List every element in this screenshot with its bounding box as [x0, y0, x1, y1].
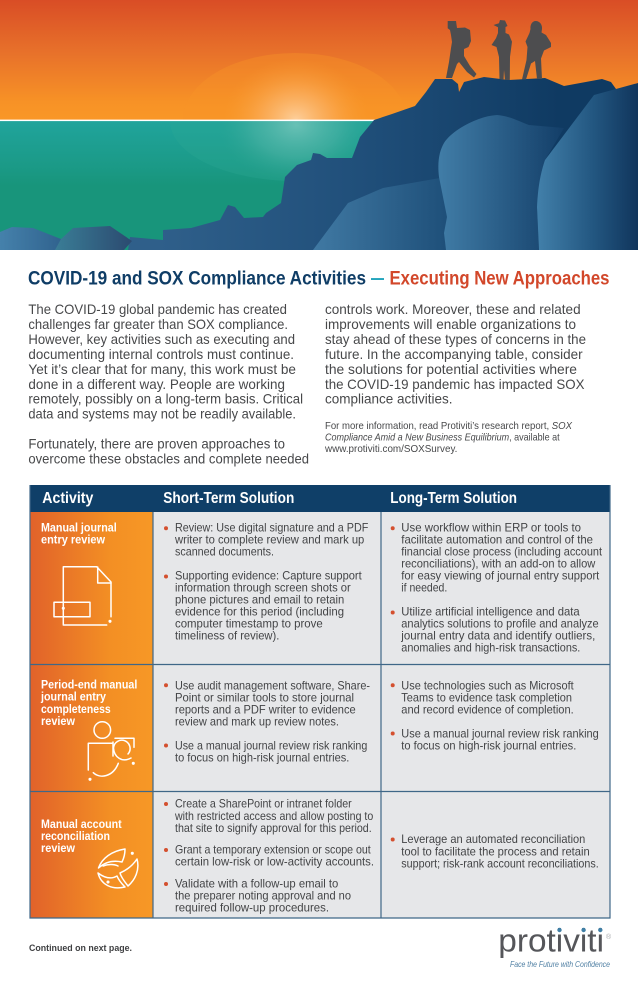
horizon line [0, 120, 380, 121]
row 1 short-term solution: information through screen shots or [175, 581, 351, 595]
hiker with backpack [446, 21, 476, 78]
row 1 short-term solution: computer timestamp to prove [175, 617, 323, 631]
title: — [371, 268, 384, 290]
intro text right column: compliance activities. [325, 392, 452, 407]
row 3 long-term solution: support; risk-rank account reconciliations. [401, 856, 599, 870]
research report note: For more information, read Protiviti’s research report, SOX [325, 421, 573, 432]
lower middle rock [313, 178, 448, 250]
row 2 short-term solution: Use audit management software, Share- [175, 679, 370, 693]
row 3 long-term solution: tool to facilitate the process and retain [401, 844, 590, 858]
title [28, 268, 610, 290]
row 2 long-term solution: Use a manual journal review risk ranking [401, 727, 599, 741]
row 1 long-term solution: Use workflow within ERP or tools to [401, 520, 581, 534]
row 1 activity: manual journal entry review: Manual journal [41, 520, 117, 534]
far-left rock [0, 227, 75, 250]
row 2 short-term solution [164, 679, 370, 765]
row 1 long-term solution: financial close process (including account [401, 544, 603, 558]
intro text right column: stay ahead of these types of concerns in the [325, 332, 586, 347]
row 1 long-term solution: facilitate automation and control of the [401, 532, 593, 546]
hikers silhouettes [446, 20, 551, 80]
icon: person with speech mark [88, 722, 134, 780]
row 2 long-term solution: Use technologies such as Microsoft [401, 679, 574, 693]
row 1 long-term solution: if needed. [401, 580, 447, 594]
table header: Long-Term Solution [390, 490, 517, 507]
sun reflection on sea [230, 121, 362, 178]
row 1 short-term solution: phone pictures and email to retain [175, 593, 344, 607]
row 2 short-term solution: Use a manual journal review risk ranking [175, 739, 367, 753]
row 2 long-term solution: Teams to evidence task completion [401, 691, 572, 705]
research report note: www.protiviti.com/SOXSurvey. [324, 444, 457, 455]
row 1 long-term solution: for easy viewing of journal entry support [401, 568, 600, 582]
row 3 long-term solution [391, 832, 599, 870]
intro text right column: controls work. Moreover, these and related [325, 302, 581, 317]
table header: Activity [42, 490, 94, 507]
row 1 long-term solution [391, 520, 603, 655]
protiviti logo [498, 923, 612, 969]
row 1 long-term solution: Utilize artificial intelligence and data [401, 605, 580, 619]
title: Executing New Approaches [390, 268, 610, 290]
protiviti logo: Face the Future with Confidence [510, 959, 610, 969]
row 1 short-term solution: Supporting evidence: Capture support [175, 569, 362, 583]
solutions table [30, 485, 610, 918]
row 3 short-term solution: that site to signify approval for this period. [175, 821, 372, 835]
row 3 short-term solution [164, 797, 374, 915]
icon: document [54, 567, 111, 625]
intro text left column: However, key activities such as executing and [28, 332, 295, 347]
title: COVID-19 and SOX Compliance Activities [28, 268, 366, 290]
protiviti logo: ® [606, 933, 612, 941]
row 2 activity: period-end completeness review: review [41, 714, 76, 728]
row 1 long-term solution: anomalies and high-risk transactions. [401, 641, 580, 655]
row 3 short-term solution: required follow-up procedures. [175, 901, 329, 915]
intro text left column: Yet it’s clear that for many, this work must be [28, 362, 296, 377]
sun glow [219, 53, 370, 120]
row 1 activity: manual journal entry review: entry review [41, 532, 106, 546]
small shore rock [55, 226, 132, 250]
intro text left column: Fortunately, there are proven approaches to [28, 437, 285, 452]
row 2 activity: period-end completeness review: Period-end manual [41, 678, 137, 692]
hero illustration: sunset over sea with hikers on cliff [0, 0, 638, 250]
row 1 long-term solution: reconciliations), with an add-on to allow [401, 556, 596, 570]
row 3 long-term solution: Leverage an automated reconciliation [401, 832, 585, 846]
intro text left column: overcome these obstacles and complete needed [28, 452, 309, 467]
research report note: Compliance Amid a New Business Equilibrium, available at [325, 432, 560, 443]
intro text right column: improvements will enable organizations to [325, 317, 576, 332]
research report note [324, 421, 573, 455]
middle rock [438, 115, 564, 250]
intro text right column: the COVID-19 pandemic has impacted SOX [325, 377, 584, 392]
row 2 activity: period-end completeness review [40, 678, 137, 780]
row 1 short-term solution: timeliness of review). [175, 629, 279, 643]
sea [0, 121, 638, 250]
hiker with hat [492, 20, 512, 80]
table backgrounds [30, 512, 610, 918]
row 2 short-term solution: to focus on high-risk journal entries. [175, 751, 349, 765]
intro text right column: the solutions for potential activities where [325, 362, 577, 377]
standing hiker [522, 21, 551, 80]
sky [0, 0, 638, 120]
row 2 long-term solution [391, 679, 599, 753]
row 3 short-term solution: with restricted access and allow posting to [174, 809, 374, 823]
intro text left column: challenges far greater than SOX compliance. [28, 317, 288, 332]
row 1 short-term solution: evidence for this period (including [175, 605, 344, 619]
row 1 short-term solution: writer to complete review and mark up [174, 532, 365, 546]
row 2 activity: period-end completeness review: completeness [41, 702, 111, 716]
right rock [537, 83, 638, 250]
row 1 long-term solution: journal entry data and identify outliers, [400, 629, 595, 643]
row 1 short-term solution: scanned documents. [175, 544, 274, 558]
icon: swirl of three blades [98, 849, 138, 888]
main cliff [128, 77, 638, 250]
row 3 short-term solution: Grant a temporary extension or scope out [175, 843, 371, 857]
row 1 short-term solution [164, 520, 368, 643]
row 1 long-term solution: analytics solutions to profile and analyze [401, 617, 599, 631]
row 2 long-term solution: to focus on high-risk journal entries. [401, 739, 576, 753]
row 3 short-term solution: certain low-risk or low-activity accounts. [175, 855, 374, 869]
continued note: Continued on next page. [29, 943, 132, 954]
row 3 short-term solution: Create a SharePoint or intranet folder [175, 797, 352, 811]
row 3 activity: manual account reconciliation review: reconciliation [41, 829, 110, 843]
row 3 activity: manual account reconciliation review [41, 817, 138, 888]
row 2 short-term solution: review and mark up review notes. [175, 715, 339, 729]
row 1 short-term solution: Review: Use digital signature and a PDF [175, 520, 368, 534]
row 2 short-term solution: reports and a PDF writer to evidence [175, 703, 356, 717]
row 2 activity: period-end completeness review: journal entry [40, 690, 106, 704]
row 3 short-term solution: the preparer noting approval and no [175, 889, 351, 903]
intro text left column [28, 302, 309, 467]
table header [30, 485, 610, 512]
protiviti logo: protiviti [498, 923, 604, 959]
row 3 activity: manual account reconciliation review: Manual account [41, 817, 122, 831]
intro text left column: done in a different way. People are working [28, 377, 285, 392]
intro text right column: future. In the accompanying table, consider [325, 347, 583, 362]
intro text left column: documenting internal controls must continue. [28, 347, 294, 362]
table header: Short-Term Solution [163, 490, 294, 507]
row 3 short-term solution: Validate with a follow-up email to [175, 877, 339, 891]
intro text left column: data and systems may not be readily available. [28, 407, 296, 422]
intro text left column: The COVID-19 global pandemic has created [28, 302, 287, 317]
row 2 long-term solution: and record evidence of completion. [401, 703, 574, 717]
intro text right column [325, 302, 586, 407]
row 1 activity: manual journal entry review [41, 520, 117, 625]
row 2 short-term solution: Point or similar tools to store journal [175, 691, 354, 705]
row 3 activity: manual account reconciliation review: review [41, 841, 76, 855]
intro text left column: remotely, possibly on a long-term basis. Critical [28, 392, 303, 407]
